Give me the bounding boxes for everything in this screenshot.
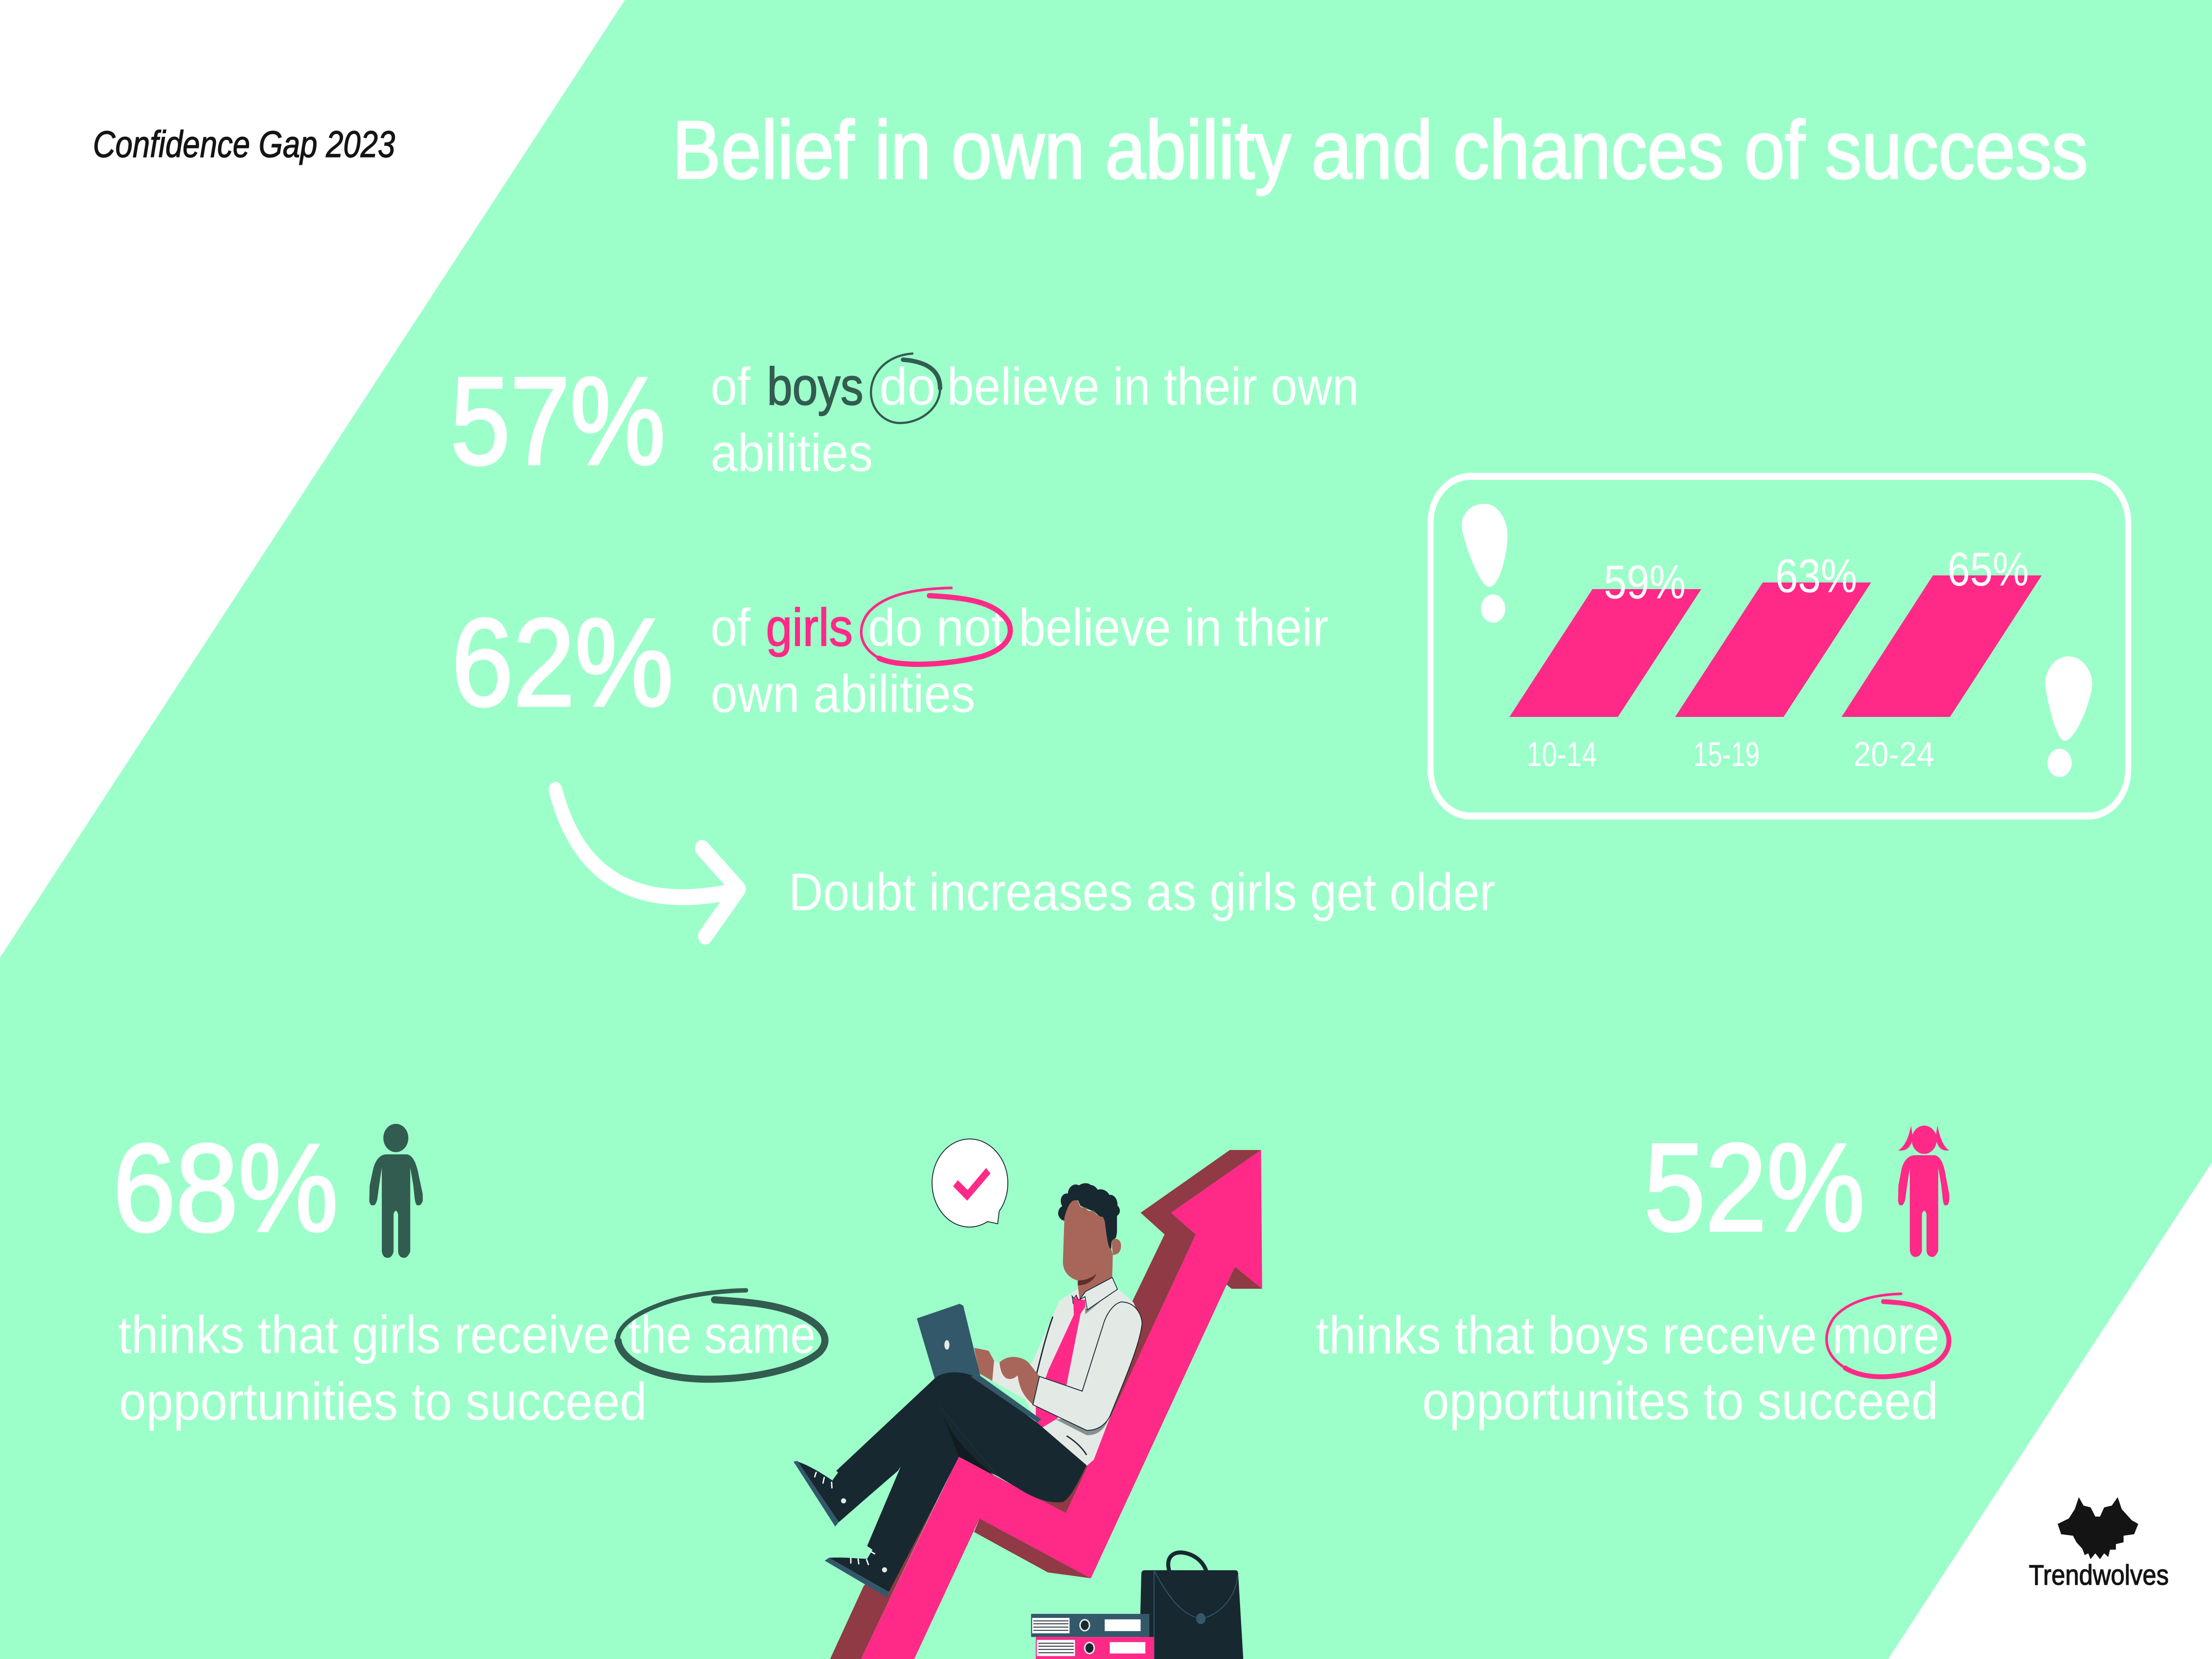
- briefcase: [1139, 1552, 1243, 1659]
- value: 65%: 65%: [1947, 543, 2029, 596]
- face and neck: [1063, 1200, 1113, 1299]
- illustration: businessman on rising arrow: [794, 1139, 1262, 1659]
- logo: Trendwolves: [2029, 1497, 2169, 1591]
- text: thinks that girls receive the same opportunities to succeed: [118, 1305, 816, 1431]
- shirt: [992, 1278, 1142, 1466]
- hand-drawn circle around do: [871, 353, 940, 423]
- stat: 57%: 57%: [450, 351, 665, 490]
- front shoe: [794, 1461, 860, 1526]
- text: of girls do not believe in their own abilities: [710, 598, 1329, 724]
- text: of boys do believe in their own abilities: of: [710, 357, 751, 416]
- hair: [1058, 1183, 1120, 1249]
- figure layer: [794, 1302, 1243, 1659]
- text: thinks that boys receive more opportunites to succeed: thinks that boys receive: [1316, 1306, 1817, 1365]
- panel: age chart: [1431, 476, 2128, 816]
- value: 59%: 59%: [1604, 556, 1686, 609]
- panel: boys belief statistic: [450, 351, 1359, 490]
- head and collar: [1058, 1183, 1121, 1327]
- leg: front: [833, 1372, 1087, 1522]
- value: 63%: 63%: [1775, 549, 1857, 603]
- speech bubble with check mark: [932, 1139, 1008, 1227]
- sleeve: [1033, 1302, 1142, 1430]
- icon: exclamation mark left: [1462, 504, 1508, 623]
- stat: 52%: 52%: [1644, 1117, 1865, 1257]
- text: thinks that girls receive the same opportunities to succeed: opportunities to succeed: [119, 1372, 647, 1431]
- arrow: rising chart arrow: [830, 1150, 1262, 1659]
- label: Confidence Gap 2023: Confidence Gap 2023: [93, 123, 395, 165]
- collar shadow: [1085, 1298, 1105, 1314]
- stat: 68%: 68%: [113, 1118, 338, 1257]
- icon: exclamation mark right: [2045, 656, 2092, 777]
- stat: 62%: 62%: [452, 592, 673, 732]
- binders: [1031, 1614, 1154, 1659]
- neck shadow: [1078, 1273, 1096, 1285]
- laptop base: [971, 1375, 1041, 1422]
- text: of girls do not believe in their own abilities: of: [710, 598, 751, 657]
- panel: girls opportunities statistic: [1316, 1117, 1949, 1431]
- left collar tip: [1072, 1295, 1078, 1304]
- wordmark: Trendwolves: [2029, 1559, 2169, 1591]
- tie: [1036, 1298, 1085, 1428]
- bar: 20-24: [1842, 575, 2042, 717]
- age label: 10-14: 10-14: [1526, 735, 1597, 774]
- text: doubt increases as girls get older: Doubt increases as girls get older: [789, 862, 1495, 922]
- text: of girls do not believe in their own abilities: own abilities: [710, 664, 975, 724]
- bar: 15-19: [1675, 582, 1871, 717]
- text: of boys do believe in their own abilities: believe in their own: [947, 357, 1359, 416]
- icon: girl: [1898, 1126, 1949, 1257]
- icon: boy: [369, 1124, 423, 1258]
- text: of girls do not believe in their own abilities: do not: [868, 598, 1005, 657]
- arrow: doubt increases: [556, 790, 739, 936]
- text: thinks that boys receive more opportunites to succeed: opportunites to succeed: [1422, 1372, 1938, 1431]
- age label: 15-19: 15-19: [1694, 735, 1760, 774]
- text: thinks that boys receive more opportunites to succeed: more: [1832, 1306, 1939, 1365]
- leg shadow: [941, 1412, 994, 1475]
- panel: boys opportunities statistic: [113, 1118, 825, 1431]
- sleeve shadow: [1056, 1416, 1110, 1435]
- ear: [1112, 1239, 1121, 1255]
- far hand: [999, 1357, 1040, 1405]
- near hand: [974, 1348, 994, 1381]
- leg: rear: [867, 1406, 998, 1592]
- laptop screen: [917, 1304, 980, 1379]
- arrow and speech bubble layer: [830, 1139, 1262, 1659]
- tie knot: [1071, 1296, 1085, 1327]
- panel: girls belief statistic: [452, 588, 1329, 732]
- text: of boys do believe in their own abilities: [710, 357, 1359, 483]
- age label: 20-24: 20-24: [1853, 735, 1935, 774]
- icon: wolf heads: [2058, 1497, 2138, 1559]
- text: of boys do believe in their own abilities: boys: [767, 357, 863, 416]
- bar: 10-14: [1509, 589, 1701, 717]
- text: of girls do not believe in their own abilities: girls: [766, 598, 853, 657]
- text: thinks that girls receive the same opportunities to succeed: thinks that girls receive: [118, 1305, 610, 1364]
- text: thinks that boys receive more opportunites to succeed: [1316, 1306, 1939, 1431]
- text: thinks that girls receive the same opportunities to succeed: the same: [628, 1305, 816, 1364]
- hand-drawn circle around do not: [861, 588, 1010, 664]
- shirt crease lines: [1036, 1317, 1087, 1455]
- collar: [1079, 1277, 1118, 1310]
- rear shoe: [825, 1551, 895, 1598]
- laptop logo: [945, 1340, 949, 1350]
- text: of boys do believe in their own abilities: abilities: [710, 423, 873, 483]
- title: Belief in own ability and chances of success: [672, 103, 2088, 196]
- hand-drawn circle around more: [1827, 1294, 1949, 1377]
- chart frame: [1431, 476, 2128, 816]
- text: of girls do not believe in their own abilities: believe in their: [1019, 598, 1329, 657]
- text: of boys do believe in their own abilities: do: [879, 357, 936, 416]
- hand-drawn circle around the same: [618, 1290, 825, 1379]
